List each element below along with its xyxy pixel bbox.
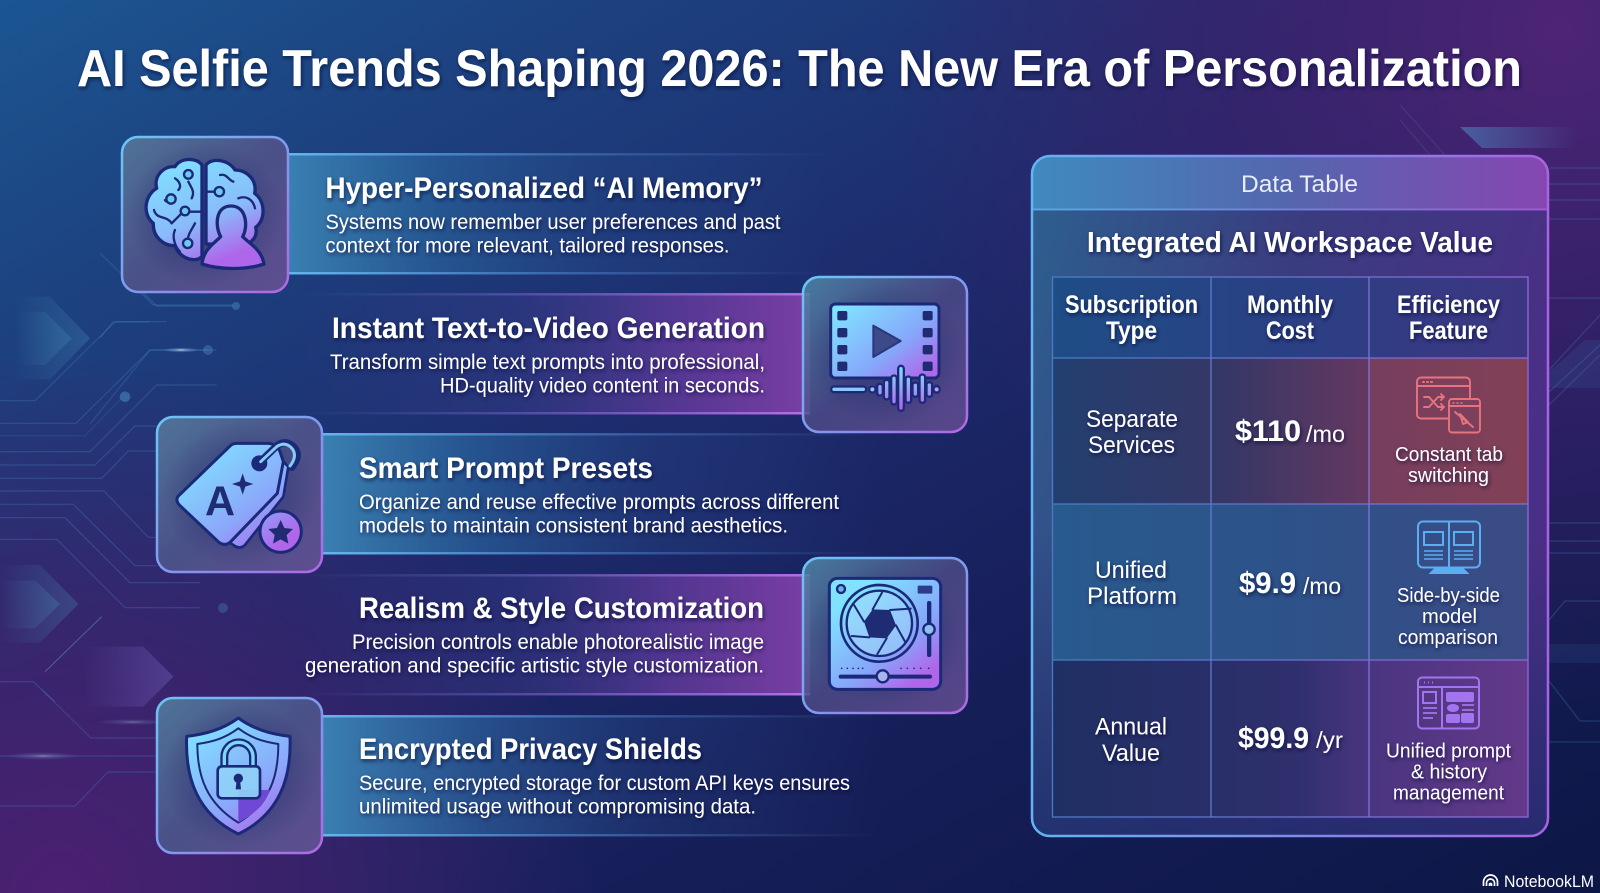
description: item 3: Organize and reuse effective prompts across different: [359, 491, 839, 514]
icon card: brain memory: [122, 137, 288, 292]
row 2 feature: model: [1422, 605, 1477, 628]
row 2 label: Unified: [1095, 557, 1167, 584]
band: item 2: [300, 293, 810, 414]
item 1 text: [326, 172, 781, 258]
item 4 text: [305, 592, 764, 678]
icon card: video generation: [803, 277, 967, 432]
row 3 label: [1095, 714, 1167, 767]
row 1 label: [1086, 406, 1178, 459]
title: AI Selfie Trends Shaping 2026: The New Era of Personalization: [77, 40, 1522, 98]
column header: efficiency feature: Feature: [1409, 317, 1488, 345]
table heading: Integrated AI Workspace Value: [1087, 227, 1493, 259]
description: item 3: [359, 491, 839, 538]
row 1 feature: Constant tab: [1395, 443, 1503, 466]
panel label: Data Table: [1241, 171, 1358, 198]
band: item 4: [300, 574, 810, 696]
panel header bar: [1032, 156, 1548, 210]
column header: monthly cost: [1247, 291, 1333, 345]
row 2 feature: [1397, 584, 1500, 649]
heading: item 2: Instant Text-to-Video Generation: [332, 312, 765, 345]
row 1 feature: [1395, 443, 1503, 487]
watermark: NotebookLM: NotebookLM: [1504, 873, 1594, 891]
row 1 price: $110: [1235, 415, 1301, 448]
description: item 4: Precision controls enable photorealistic image: [352, 631, 764, 654]
row 3 label: Value: [1102, 740, 1160, 767]
description: item 5: unlimited usage without compromising data.: [359, 796, 756, 818]
description: item 2: HD-quality video content in seconds.: [440, 374, 765, 398]
column header: monthly cost: Monthly: [1247, 291, 1333, 319]
row 2 price: /mo: [1303, 573, 1341, 599]
table grid: [1052, 277, 1528, 817]
description: item 4: generation and specific artistic style customization.: [305, 654, 764, 678]
column header: subscription type: Type: [1106, 317, 1157, 345]
row 2 price: [1239, 567, 1341, 600]
row 3 feature: & history: [1411, 760, 1488, 784]
column header: efficiency feature: Efficiency: [1397, 291, 1500, 319]
description: item 4: [305, 631, 764, 678]
panel: data table: [1032, 156, 1548, 836]
description: item 2: Transform simple text prompts into professional,: [330, 351, 765, 374]
description: item 3: models to maintain consistent brand aesthetics.: [359, 514, 788, 538]
icon: side-by-side comparison: [1418, 522, 1480, 573]
icon card: privacy shield: [157, 698, 322, 853]
heading: item 1: Hyper-Personalized “AI Memory”: [326, 172, 762, 205]
column header: efficiency feature: [1397, 291, 1500, 345]
row 1 label: Separate: [1086, 406, 1178, 433]
column header: subscription type: [1065, 291, 1198, 345]
description: item 1: [326, 211, 781, 258]
icon card: prompt tag: [157, 417, 322, 572]
item 5 text: [359, 733, 850, 818]
row 1 price: [1235, 415, 1345, 448]
icon: unified prompt manager: [1418, 678, 1479, 728]
column header: subscription type: Subscription: [1065, 291, 1198, 319]
row 1 feature: switching: [1408, 464, 1489, 487]
row 3 feature: Unified prompt: [1386, 740, 1511, 762]
description: item 1: Systems now remember user preferences and past: [326, 211, 781, 234]
row 3 price: /yr: [1316, 727, 1343, 753]
icon: tab switching: [1417, 378, 1480, 432]
row 3 feature: management: [1393, 782, 1504, 804]
row 2 price: $9.9: [1239, 567, 1296, 600]
band: item 1: [288, 153, 830, 274]
heading: item 4: Realism & Style Customization: [359, 592, 764, 625]
item 2 text: [330, 312, 765, 398]
row 3 label: Annual: [1095, 714, 1167, 740]
icon card: prompt tag: A: [205, 478, 235, 525]
row 2 label: [1087, 557, 1177, 610]
row 3 feature: [1386, 740, 1511, 804]
row 1 price: /mo: [1306, 421, 1345, 447]
description: item 5: [359, 772, 850, 818]
heading: item 5: Encrypted Privacy Shields: [359, 733, 702, 766]
column header: monthly cost: Cost: [1266, 317, 1315, 345]
band: item 5: [323, 715, 880, 836]
heading: item 3: Smart Prompt Presets: [359, 452, 653, 485]
icon card: aperture controls: [803, 558, 967, 713]
row 2 label: Platform: [1087, 583, 1177, 610]
description: item 5: Secure, encrypted storage for custom API keys ensures: [359, 772, 850, 795]
description: item 2: [330, 351, 765, 398]
item 3 text: [359, 452, 839, 538]
description: item 1: context for more relevant, tailored responses.: [326, 234, 730, 258]
row 3 price: $99.9: [1238, 722, 1309, 755]
row 2 feature: Side-by-side: [1397, 584, 1500, 607]
row 2 feature: comparison: [1398, 626, 1498, 649]
row 1 label: Services: [1088, 432, 1175, 459]
band: item 3: [323, 433, 880, 554]
